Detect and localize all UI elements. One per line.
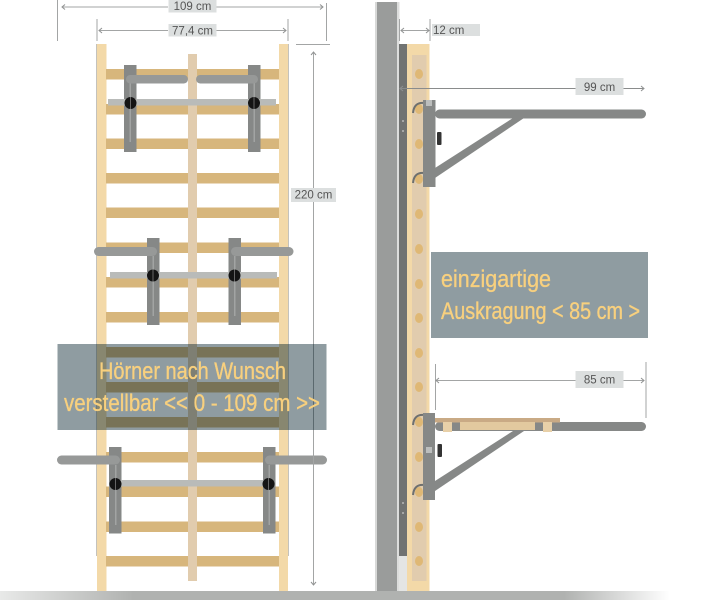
callout: unique overhang: Auskragung < 85 cm > bbox=[441, 298, 640, 325]
right rail bbox=[279, 44, 289, 591]
side view mounting strip bbox=[399, 44, 407, 591]
callout: adjustable horns: Hörner nach Wunsch bbox=[99, 358, 286, 385]
side view wall bbox=[375, 2, 400, 591]
front view wall bars bbox=[96, 44, 289, 591]
dimension: 85 cm bbox=[436, 362, 646, 418]
upper side bracket bbox=[413, 100, 646, 187]
callout: unique overhang: einzigartige bbox=[441, 266, 551, 293]
rungs bbox=[106, 69, 279, 566]
bottom horn set bbox=[57, 447, 327, 534]
dimension: 85 cm: 85 cm bbox=[584, 374, 615, 386]
dimension: 12 cm bbox=[400, 19, 480, 41]
callout: unique overhang bbox=[431, 252, 648, 338]
side view wood rail with holes bbox=[407, 44, 430, 591]
dimension: 99 cm: 99 cm bbox=[584, 82, 615, 94]
middle horn set bbox=[94, 238, 294, 325]
lower side bracket with shelf bbox=[413, 413, 646, 500]
top horn set bbox=[108, 65, 276, 152]
dimension: 109 cm bbox=[58, 0, 326, 41]
dimension: 220 cm: 220 cm bbox=[295, 190, 332, 202]
dimension: 220 cm bbox=[291, 44, 336, 585]
dimension: 77,4 cm bbox=[97, 19, 288, 41]
left rail bbox=[96, 44, 106, 591]
center post bbox=[188, 54, 197, 581]
dimension: 109 cm: 109 cm bbox=[174, 1, 211, 13]
dimension: 77,4 cm: 77,4 cm bbox=[172, 26, 213, 38]
dimension: 12 cm: 12 cm bbox=[433, 25, 464, 37]
floor bbox=[0, 591, 705, 600]
callout: adjustable horns: verstellbar << 0 - 109 cm >> bbox=[64, 390, 320, 417]
dimension: 99 cm bbox=[400, 78, 644, 95]
callout: adjustable horns bbox=[58, 344, 326, 430]
